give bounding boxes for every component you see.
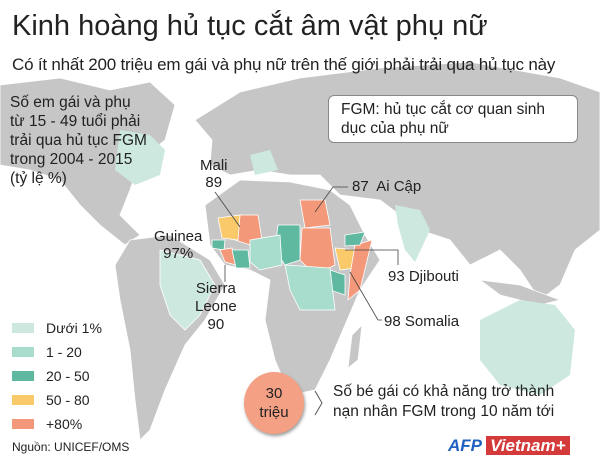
arrow: [314, 390, 322, 416]
Australia: [480, 300, 575, 395]
legend: [12, 320, 102, 432]
legend: +80%: [46, 416, 82, 432]
Greenland / N America light: [115, 130, 165, 185]
legend: Dưới 1%: [46, 320, 102, 336]
label: Sierra Leone: 90: [208, 316, 224, 333]
subtitle: Có ít nhất 200 triệu em gái và phụ nữ trên thế giới phải trải qua hủ tục này: [12, 55, 555, 74]
legend: 50 - 80: [46, 392, 90, 408]
label: Sierra Leone: [195, 280, 237, 333]
text block: legend title: trải qua hủ tục FGM: [10, 132, 147, 149]
text block: legend title: từ 15 - 49 tuổi phải: [10, 113, 140, 130]
label: Ai Cap: 87 Ai Cập: [352, 178, 421, 195]
North America: [0, 78, 175, 245]
circle: 30 trieu: 30: [266, 385, 282, 402]
France: [250, 150, 278, 175]
South America: [115, 235, 225, 440]
Indonesia: [480, 280, 560, 305]
Africa colored: [212, 200, 372, 310]
text block: legend title: [10, 94, 147, 187]
label: Djibouti: 93 Djibouti: [388, 268, 459, 285]
label: Mali: [200, 157, 228, 191]
legend: 20 - 50: [46, 368, 90, 384]
text: 30 trieu description: nạn nhân FGM trong 10 năm tới: [333, 403, 554, 420]
logo: AFP Vietnam+: [448, 436, 566, 455]
source: Nguồn: UNICEF/OMS: [12, 440, 129, 454]
Europe/Asia: [195, 62, 600, 300]
title: Kinh hoàng hủ tục cắt âm vật phụ nữ: [12, 10, 488, 42]
legend: 1 - 20: [46, 344, 82, 360]
label: Sierra Leone: Leone: [195, 298, 237, 315]
callout: FGM definition: [328, 95, 578, 143]
label: Mali: Mali: [200, 157, 228, 174]
Madagascar: [348, 325, 362, 368]
label: Somalia: 98 Somalia: [384, 313, 459, 330]
South America light: [160, 250, 215, 330]
label: Guinea: Guinea: [154, 228, 202, 245]
Africa: [205, 180, 380, 395]
circle: 30 trieu: triệu: [259, 404, 289, 421]
India: [395, 205, 430, 262]
label: Guinea: [154, 228, 202, 262]
circle: 30 trieu: [244, 372, 304, 434]
callout: FGM definition: dục của phụ nữ: [341, 120, 449, 137]
label: Mali: 89: [205, 174, 222, 191]
text block: legend title: Số em gái và phụ: [10, 94, 131, 111]
label: Sierra Leone: Sierra: [196, 280, 236, 297]
text: 30 trieu description: Số bé gái có khả năng trở thành: [333, 383, 554, 400]
label: Guinea: 97%: [163, 245, 193, 262]
text block: legend title: (tỷ lệ %): [10, 170, 67, 187]
text block: legend title: trong 2004 - 2015: [10, 151, 132, 168]
text: 30 trieu description: [333, 383, 554, 420]
callout: FGM definition: FGM: hủ tục cắt cơ quan sinh: [341, 101, 545, 118]
